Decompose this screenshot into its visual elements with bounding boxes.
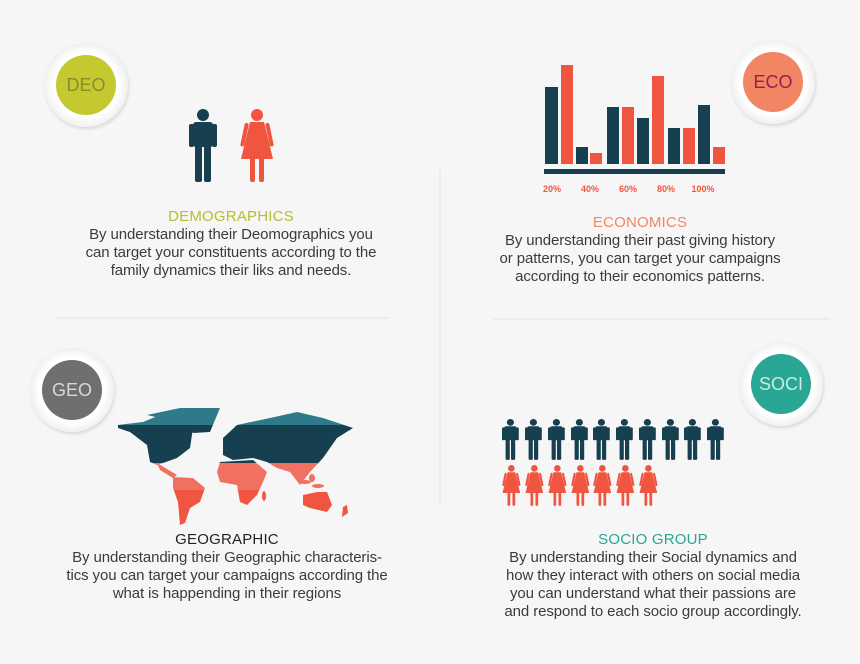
badge: ECO: ECO [753, 72, 792, 92]
icon: man [189, 109, 217, 182]
body: geographic: tics you can target your campaigns according the [66, 567, 388, 584]
bar chart [543, 65, 725, 194]
body: economics: according to their economics patterns. [515, 268, 765, 285]
body: geographic: By understanding their Geographic characteris- [72, 549, 382, 566]
badge: SOCI [739, 342, 823, 426]
body: socio group: how they interact with others on social media [506, 567, 800, 584]
world map [118, 408, 353, 525]
heading: geographic: GEOGRAPHIC [175, 531, 279, 548]
text: demographics [86, 208, 376, 279]
body: socio group: and respond to each socio group accordingly. [504, 603, 802, 620]
bar chart: 80% [657, 184, 675, 194]
icon: woman [240, 109, 274, 182]
text: economics [500, 214, 780, 285]
bar chart: 60% [619, 184, 637, 194]
body: geographic: what is happending in their regions [113, 585, 341, 602]
heading: demographics: DEMOGRAPHICS [168, 208, 294, 225]
body: demographics: family dynamics their liks and needs. [111, 262, 351, 279]
body: socio group: By understanding their Social dynamics and [509, 549, 797, 566]
socio group people [502, 419, 724, 506]
text: socio group [504, 531, 802, 620]
badge: GEO: GEO [52, 380, 92, 400]
badge: DEO: DEO [66, 75, 106, 95]
badge: DEO [44, 43, 128, 127]
text: geographic [66, 531, 388, 602]
body: economics [500, 232, 780, 285]
bar chart: 100% [691, 184, 715, 194]
body: demographics: can target your constituents according to the [86, 244, 376, 261]
body: demographics: By understanding their Deomographics you [89, 226, 373, 243]
body: socio group [504, 549, 802, 620]
bar chart: 40% [581, 184, 599, 194]
body: socio group: you can understand what their passions are [510, 585, 796, 602]
heading: economics: ECONOMICS [593, 214, 687, 231]
body: geographic [66, 549, 388, 602]
body: economics: By understanding their past giving history [505, 232, 775, 249]
bar chart: 20% [543, 184, 561, 194]
body: economics: or patterns, you can target your campaigns [500, 250, 780, 267]
body: demographics [86, 226, 376, 279]
badge: ECO [731, 40, 815, 124]
badge: GEO [30, 348, 114, 432]
heading: socio group: SOCIO GROUP [598, 531, 708, 548]
badge: SOCI: SOCI [759, 374, 803, 394]
